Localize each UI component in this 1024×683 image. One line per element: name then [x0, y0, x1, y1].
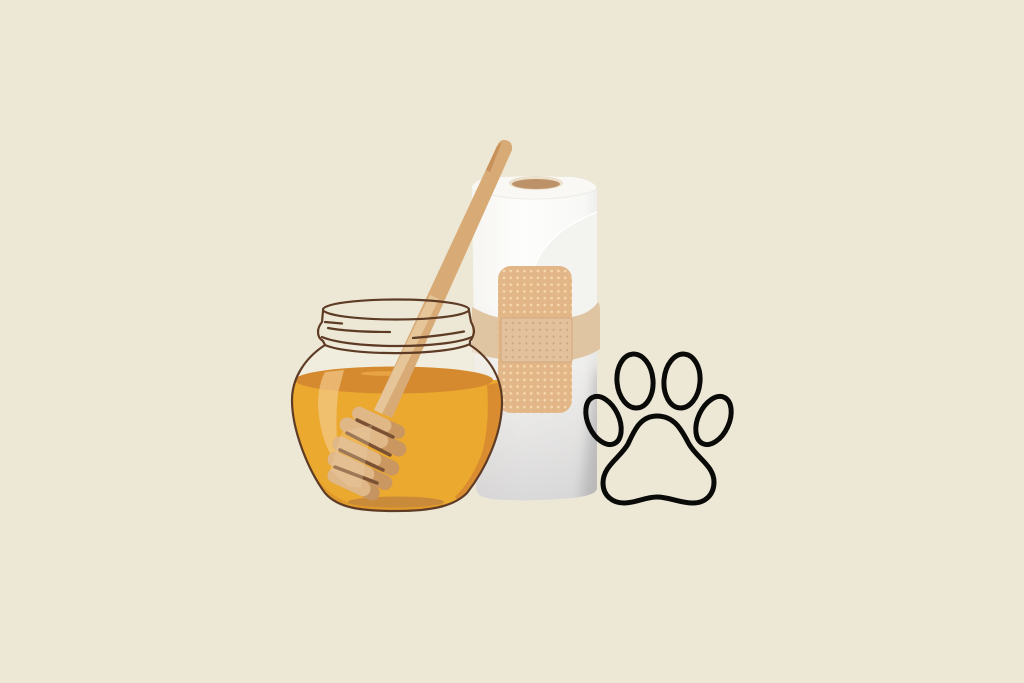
disc highlights	[325, 404, 394, 499]
toe 2	[615, 353, 655, 409]
illustration: honey jar, paper roll with bandage, and paw print	[290, 140, 734, 512]
toe 3	[662, 353, 702, 409]
paw print	[579, 353, 738, 503]
bandage center pad	[501, 318, 572, 362]
paper towel roll	[472, 176, 598, 500]
disc 5	[325, 466, 382, 503]
bandage vertical strip	[498, 266, 572, 413]
loose sheet edge	[535, 212, 597, 320]
facet highlight	[330, 425, 372, 488]
jar outline and rim	[292, 300, 502, 511]
grooves	[335, 420, 393, 483]
roll top face	[472, 176, 596, 198]
disc 3	[330, 434, 402, 478]
bandage strap	[472, 302, 600, 360]
dipper stick	[374, 140, 512, 418]
bandage	[472, 266, 600, 413]
honey surface	[295, 366, 493, 394]
honey puddle	[348, 496, 444, 508]
main pad	[603, 416, 714, 503]
disc 2	[337, 415, 409, 459]
disc 4	[325, 449, 395, 493]
honey jar	[288, 140, 512, 516]
toe 4	[689, 391, 738, 450]
honey contents	[293, 366, 501, 510]
toe 1	[579, 391, 628, 450]
jar glass	[292, 345, 502, 511]
disc 1	[350, 404, 407, 441]
glass reflection	[318, 370, 344, 454]
surface highlight	[361, 371, 392, 376]
cardboard core	[509, 176, 563, 190]
dipper head	[325, 404, 409, 503]
honey right shade	[455, 382, 501, 499]
honey lower shade	[318, 480, 447, 510]
honey body	[293, 380, 498, 504]
